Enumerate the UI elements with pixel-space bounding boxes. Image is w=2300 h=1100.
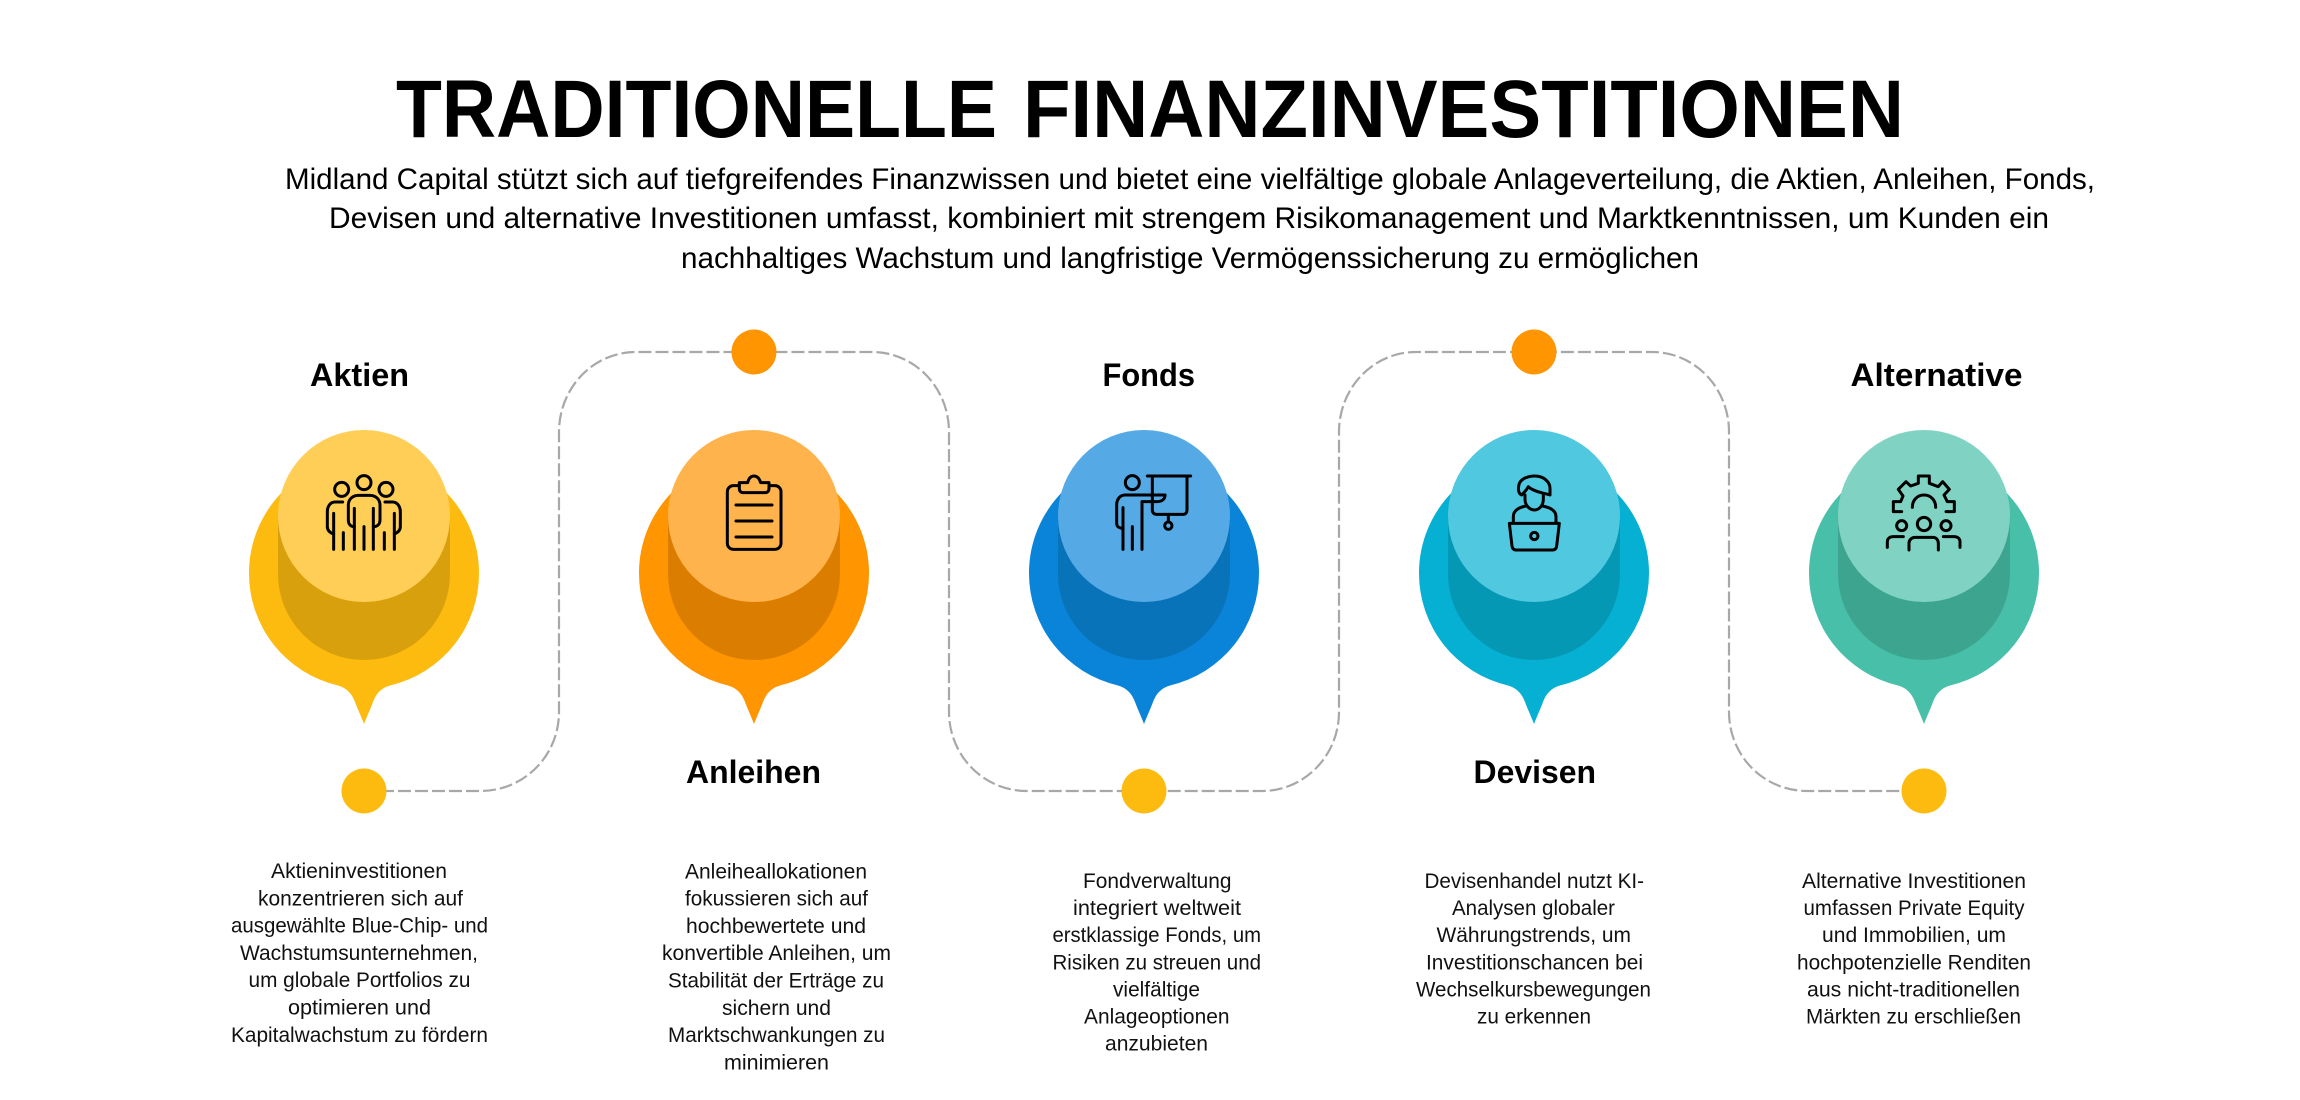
description: Aktien: optimieren und [288, 996, 431, 1020]
description: Aktien: konzentrieren sich auf [258, 887, 463, 910]
description: Alternative: Alternative Investitionen [1802, 870, 2026, 893]
description: Fonds [1052, 870, 1261, 1055]
marker dot [1512, 330, 1556, 374]
panel: Devisen [1416, 330, 1651, 1028]
description: Alternative: Märkten zu erschließen [1806, 1005, 2021, 1028]
pin: teal [1809, 430, 2039, 724]
panel: Fonds [1029, 357, 1261, 1055]
description: Devisen: zu erkennen [1477, 1005, 1591, 1028]
description: Anleihen: Stabilität der Erträge zu [668, 970, 884, 992]
description: Anleihen: konvertible Anleihen, um [662, 942, 891, 965]
description: Fonds: anzubieten [1105, 1032, 1208, 1055]
marker dot [732, 330, 776, 374]
icon: team of people [327, 476, 400, 549]
description: Fonds: Anlageoptionen [1084, 1005, 1230, 1028]
description: Fonds: Risiken zu streuen und [1052, 951, 1261, 974]
description: Fonds: erstklassige Fonds, um [1052, 924, 1261, 947]
description: Alternative: und Immobilien, um [1822, 924, 2006, 947]
description: Aktien [231, 860, 488, 1047]
description: Anleihen: sichern und [722, 997, 831, 1020]
intro paragraph: Midland Capital stützt sich auf tiefgreifendes Finanzwissen und bietet eine vielfältige globale Anlageverteilung, die Aktien, Anleihen, Fonds, [285, 163, 2095, 196]
description: Fonds: vielfältige [1113, 978, 1200, 1001]
intro paragraph: Devisen und alternative Investitionen umfasst, kombiniert mit strengem Risikomanagement und Marktkenntnissen, um Kunden ein [329, 202, 2049, 235]
dashed connector path [364, 352, 1924, 791]
pin: yellow [249, 430, 479, 724]
description: Anleihen: minimieren [724, 1051, 829, 1074]
panel: Alternative [1797, 357, 2039, 1028]
description: Anleihen [662, 860, 891, 1074]
heading: Anleihen: Anleihen [686, 754, 821, 790]
marker dot [1122, 768, 1166, 814]
heading: Aktien: Aktien [310, 357, 409, 393]
description: Alternative: hochpotenzielle Renditen [1797, 951, 2031, 974]
description: Anleihen: hochbewertete und [686, 915, 866, 938]
icon: clipboard [727, 476, 781, 549]
description: Alternative: umfassen Private Equity [1804, 897, 2025, 920]
panel: Aktien [231, 357, 488, 1047]
description: Devisen: Währungstrends, um [1436, 924, 1631, 947]
description: Aktien: Kapitalwachstum zu fördern [231, 1024, 488, 1047]
title [396, 64, 1904, 155]
description: Anleihen: Marktschwankungen zu [668, 1024, 885, 1047]
marker dot [1902, 768, 1946, 814]
description: Devisen: Wechselkursbewegungen [1416, 978, 1651, 1001]
pin: orange [639, 430, 869, 724]
description: Alternative [1797, 870, 2031, 1028]
description: Aktien: um globale Portfolios zu [248, 969, 470, 992]
title: FINANZINVESTITIONEN [1023, 64, 1904, 155]
description: Fonds: Fondverwaltung [1083, 870, 1232, 893]
description: Fonds: integriert weltweit [1073, 897, 1241, 920]
description: Devisen: Analysen globaler [1452, 897, 1615, 920]
intro paragraph [285, 163, 2095, 275]
icon: gear with people [1887, 476, 1960, 550]
panel: Anleihen [639, 330, 891, 1074]
heading: Fonds: Fonds [1102, 357, 1195, 393]
heading: Devisen: Devisen [1474, 754, 1596, 790]
marker dot [342, 768, 386, 814]
pin: cyan [1419, 430, 1649, 724]
description: Aktien: Wachstumsunternehmen, [240, 942, 478, 965]
description: Devisen: Investitionschancen bei [1426, 951, 1643, 974]
description: Anleihen: Anleiheallokationen [685, 860, 867, 883]
title: TRADITIONELLE [396, 64, 997, 155]
description: Alternative: aus nicht-traditionellen [1807, 978, 2020, 1001]
description: Aktien: ausgewählte Blue-Chip- und [231, 915, 488, 938]
description: Aktien: Aktieninvestitionen [271, 860, 447, 883]
intro paragraph: nachhaltiges Wachstum und langfristige Vermögenssicherung zu ermöglichen [681, 242, 1699, 275]
icon: presenter with board [1117, 476, 1191, 549]
description: Anleihen: fokussieren sich auf [685, 888, 868, 911]
description: Devisen [1416, 870, 1651, 1028]
icon: person at laptop [1509, 476, 1559, 550]
heading: Alternative: Alternative [1850, 357, 2022, 393]
pin: blue [1029, 430, 1259, 724]
description: Devisen: Devisenhandel nutzt KI- [1424, 870, 1644, 893]
